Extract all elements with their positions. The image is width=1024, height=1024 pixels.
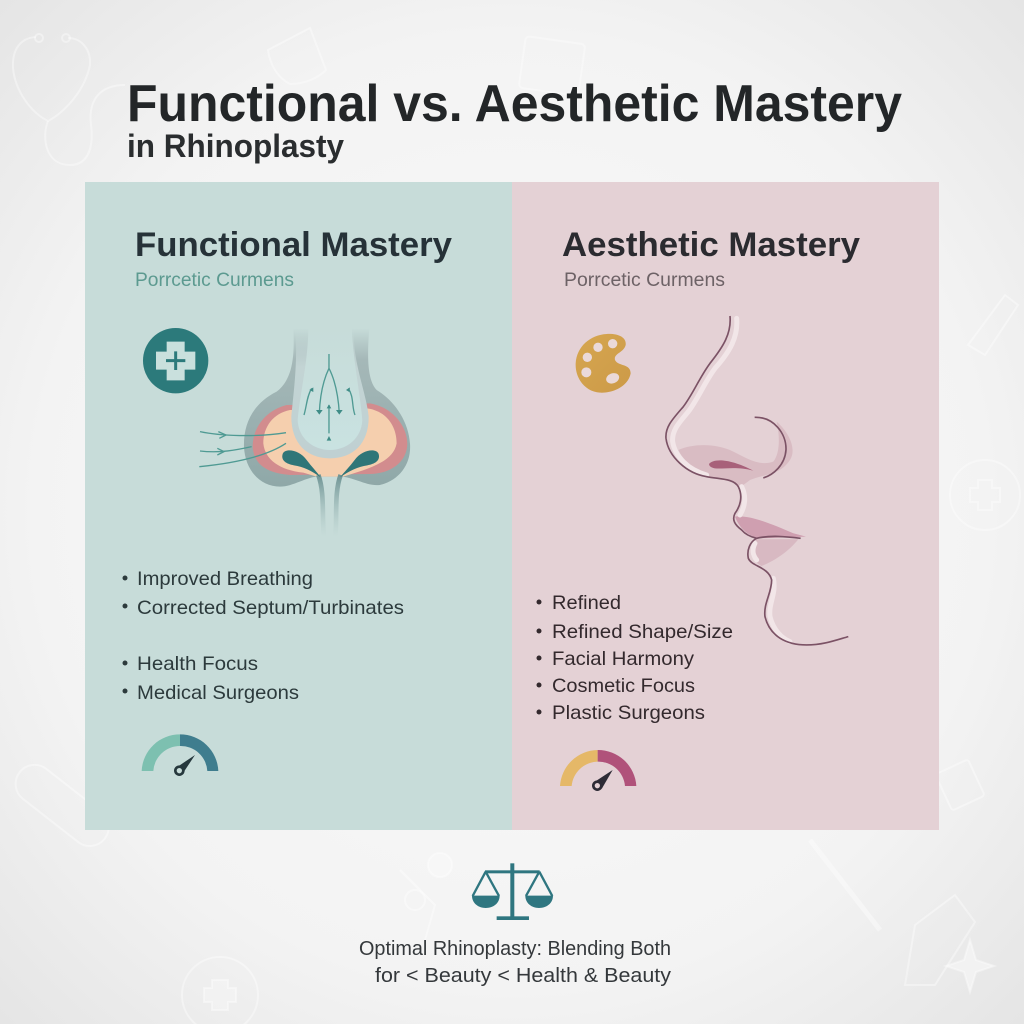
heading: functional mastery: Functional Mastery [135, 226, 452, 264]
bullet list: aesthetic: Plastic Surgeons [552, 702, 705, 724]
bullet list: functional: Corrected Septum/Turbinates [137, 597, 404, 619]
bullet list: aesthetic: Cosmetic Focus [552, 675, 695, 697]
bullet list: functional: Medical Surgeons [137, 682, 299, 704]
subheading: aesthetic: Porrcetic Curmens [564, 270, 725, 291]
title: in Rhinoplasty [127, 128, 344, 164]
icon: balance scale [472, 863, 553, 920]
heading: aesthetic mastery: Aesthetic Mastery [562, 226, 860, 264]
bullet list: aesthetic: Refined Shape/Size [552, 621, 733, 643]
bullet list: aesthetic: Facial Harmony [552, 648, 694, 670]
conclusion text [359, 938, 671, 987]
title: Functional vs. Aesthetic Mastery [127, 75, 902, 133]
panel: aesthetic mastery [512, 182, 939, 830]
bullet list: functional: Improved Breathing [137, 568, 313, 590]
diagram: nose airflow [199, 328, 410, 537]
bullet list: aesthetic [536, 592, 733, 724]
bullet list: functional: Health Focus [137, 653, 258, 675]
conclusion text: Optimal Rhinoplasty: Blending Both [359, 938, 671, 960]
bullet list: aesthetic: Refined [552, 592, 621, 614]
gauge: aesthetic [560, 750, 636, 790]
bullet list: functional [122, 568, 404, 704]
title [127, 75, 902, 164]
conclusion text: for < Beauty < Health & Beauty [375, 965, 671, 987]
diagram: nose profile [666, 316, 848, 645]
icon: palette [576, 334, 631, 393]
subheading: functional: Porrcetic Curmens [135, 270, 294, 291]
icon: medical cross [143, 328, 208, 393]
panel: functional mastery [85, 182, 512, 830]
gauge: functional [142, 734, 218, 775]
